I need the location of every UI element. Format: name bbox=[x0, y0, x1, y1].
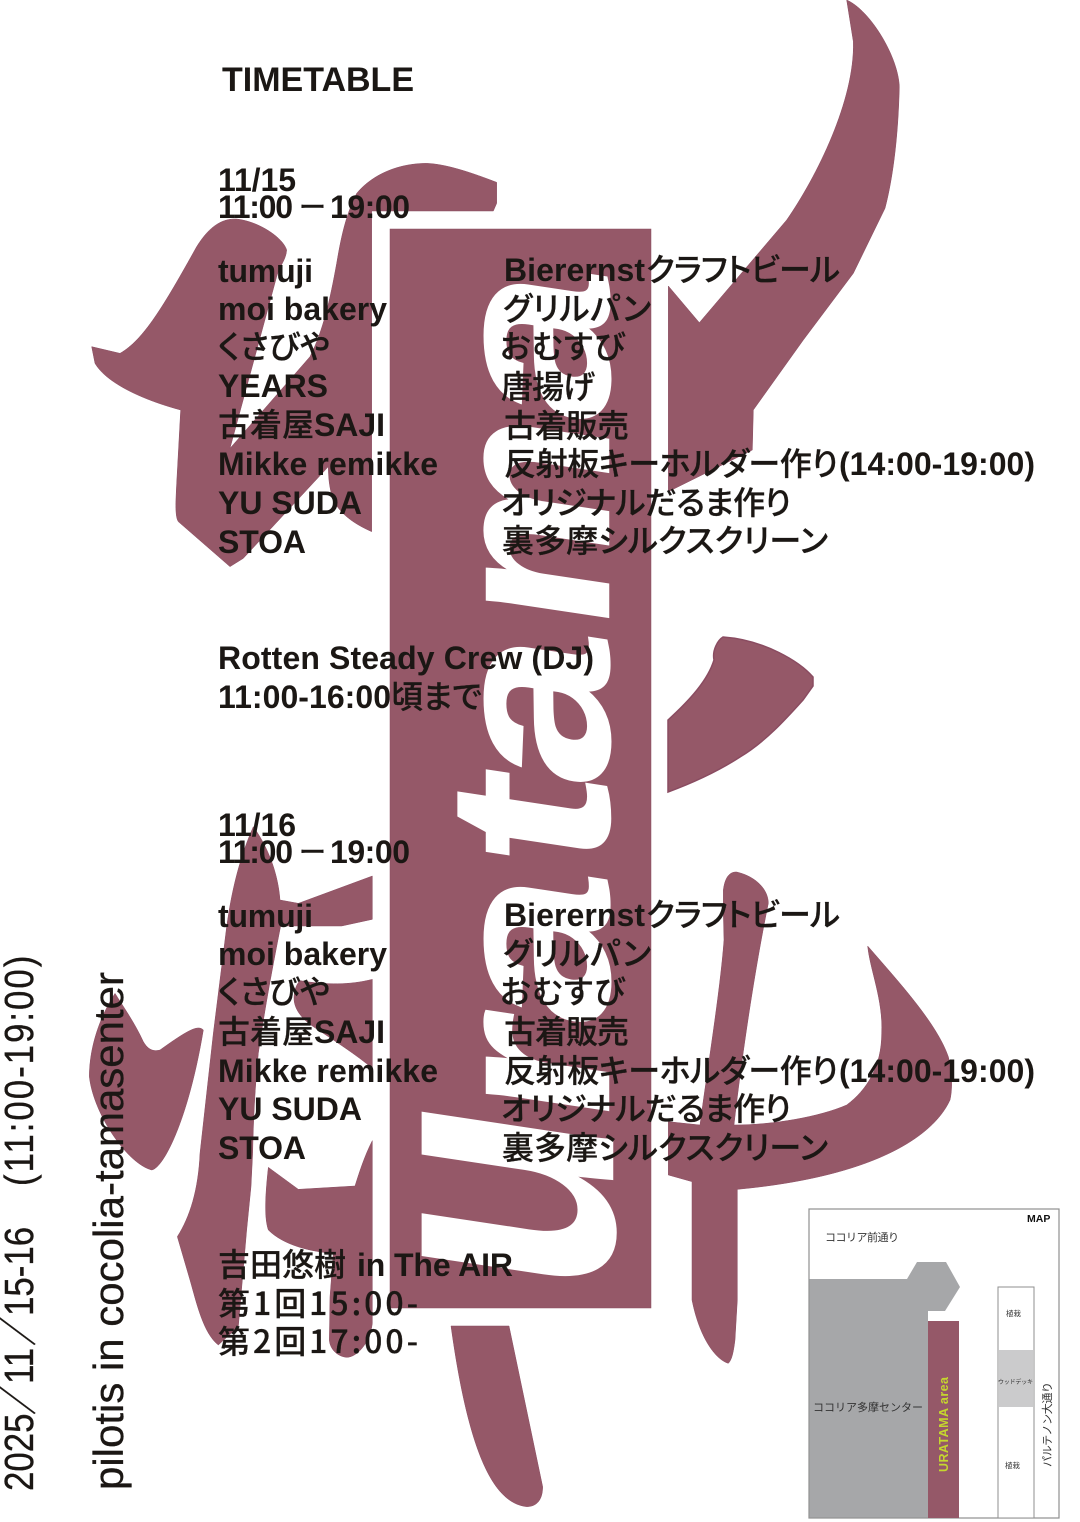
kanji calligraphy background bbox=[89, 0, 952, 1507]
date and hours, day one: 11:00 bbox=[218, 189, 293, 225]
map labels: ウッドデッキ bbox=[998, 1377, 1033, 1386]
map labels: 植栽 bbox=[1005, 1460, 1020, 1471]
date and hours, day two: ー bbox=[299, 831, 326, 871]
DJ slot: Rotten Steady Crew (DJ) bbox=[218, 640, 594, 676]
map labels: 植栽 bbox=[1006, 1308, 1022, 1319]
date and hours, day two: 19:00 bbox=[330, 834, 410, 870]
kanji stroke: upper left bbox=[92, 163, 497, 567]
vendor names, day one: YU SUDA bbox=[218, 485, 362, 521]
map labels: ココリア多摩センター bbox=[813, 1399, 923, 1415]
date and hours, day two: 11/16 bbox=[218, 807, 296, 843]
performance slot: 第1回15:00- bbox=[218, 1279, 418, 1325]
kanji stroke: lower right bbox=[668, 872, 952, 1363]
vendor names, day one: Mikke remikke bbox=[218, 446, 438, 482]
vendor offerings, day two bbox=[500, 890, 1035, 1169]
title: TIMETABLE bbox=[222, 61, 414, 99]
map frame bbox=[809, 1209, 1059, 1518]
date and hours, day two: 11:00 bbox=[218, 834, 293, 870]
vendor offerings, day one: グリルパン bbox=[503, 284, 651, 330]
map labels: URATAMA area bbox=[937, 1376, 951, 1472]
vendor offerings, day one: おむすび bbox=[500, 322, 626, 368]
kanji stroke: bottom spike bbox=[451, 1326, 543, 1507]
vendor names, day two: 古着屋 bbox=[218, 1007, 314, 1053]
vendor names, day two: SAJI bbox=[314, 1014, 385, 1050]
map labels: MAP bbox=[1027, 1213, 1050, 1225]
block: day one timetable bbox=[218, 162, 1035, 718]
vendor names, day one: YEARS bbox=[218, 368, 328, 404]
kanji stroke: lower left main bbox=[177, 827, 372, 1345]
vertical venue text: pilotis in cocolia-tamasenter bbox=[85, 972, 132, 1490]
vendor names, day one: STOA bbox=[218, 524, 306, 560]
performance slot: 第2回17:00- bbox=[218, 1317, 418, 1363]
vendor names, day two: moi bakery bbox=[218, 936, 387, 972]
kanji stroke: lower left inner upper bbox=[294, 979, 372, 1068]
vendor offerings, day two: オリジナルだるま作り bbox=[501, 1084, 791, 1130]
map building: cocolia tama center bbox=[810, 1262, 960, 1518]
vendor names, day two: くさびや bbox=[218, 967, 330, 1013]
vendor offerings, day one: クラフトビール bbox=[646, 245, 840, 291]
map labels: ココリア前通り bbox=[825, 1229, 899, 1245]
vendor names, day two: Mikke remikke bbox=[218, 1053, 438, 1089]
vendor names, day two: tumuji bbox=[218, 898, 313, 934]
vendor offerings, day one: 唐揚げ bbox=[501, 362, 595, 408]
vendor names, day one: tumuji bbox=[218, 253, 313, 289]
map strip: planting and wood deck bbox=[998, 1287, 1034, 1518]
kanji stroke: middle right bbox=[668, 637, 813, 792]
vendor offerings, day two: 裏多摩シルクスクリーン bbox=[502, 1123, 828, 1169]
vendor offerings, day one: 反射板キーホルダー作り bbox=[504, 439, 838, 485]
vendor offerings, day two: 反射板キーホルダー作り bbox=[504, 1046, 838, 1092]
vendor names, day two: STOA bbox=[218, 1130, 306, 1166]
white word: uratama: t bbox=[401, 753, 657, 879]
vendor names, day one: くさびや bbox=[218, 322, 330, 368]
white word: uratama: m bbox=[401, 394, 657, 640]
DJ slot bbox=[218, 640, 594, 718]
white word: uratama bbox=[289, 247, 689, 1314]
vendor names, day two: YU SUDA bbox=[218, 1091, 362, 1127]
vendor offerings, day two: おむすび bbox=[500, 967, 626, 1013]
performance slot: 吉田悠樹 bbox=[218, 1240, 346, 1286]
vendor offerings, day one: Bierernst bbox=[504, 252, 645, 288]
vendor offerings, day two: Bierernst bbox=[504, 897, 645, 933]
map area: URATAMA bbox=[928, 1321, 959, 1518]
date and hours, day one: ー bbox=[299, 186, 326, 226]
vertical date text bbox=[0, 956, 44, 1491]
kanji stroke: lower left blob bbox=[89, 993, 203, 1170]
white word: uratama: a bbox=[401, 850, 657, 1040]
map labels bbox=[813, 1213, 1055, 1472]
vendor offerings, day two: (14:00-19:00) bbox=[839, 1053, 1035, 1089]
DJ slot: 頃まで bbox=[391, 672, 482, 718]
map labels: パルテノン大通り bbox=[1039, 1382, 1055, 1467]
vendor names, day one: SAJI bbox=[314, 407, 385, 443]
vendor offerings, day one bbox=[500, 245, 1035, 562]
date and hours, day one: 19:00 bbox=[330, 189, 410, 225]
performance slot: in The AIR bbox=[357, 1247, 513, 1283]
white word: uratama: a bbox=[401, 247, 657, 437]
kanji stroke: lower left inner lower bbox=[266, 1141, 372, 1357]
vendor names, day one: moi bakery bbox=[218, 291, 387, 327]
vendor names, day one bbox=[218, 253, 438, 560]
date and hours, day one: 11/15 bbox=[218, 162, 296, 198]
map bbox=[809, 1209, 1059, 1518]
central maroon panel with white lettering bbox=[289, 229, 689, 1314]
vendor offerings, day two: クラフトビール bbox=[646, 890, 840, 936]
white word: uratama: u bbox=[289, 1072, 689, 1314]
vendor offerings, day one: オリジナルだるま作り bbox=[501, 478, 791, 524]
vendor names, day one: 古着屋 bbox=[218, 400, 314, 446]
vendor names, day two bbox=[218, 898, 438, 1166]
vendor offerings, day one: 裏多摩シルクスクリーン bbox=[502, 516, 828, 562]
vendor offerings, day one: (14:00-19:00) bbox=[839, 446, 1035, 482]
vendor offerings, day one: 古着販売 bbox=[504, 401, 629, 447]
vendor offerings, day two: グリルパン bbox=[503, 929, 651, 975]
DJ slot: 11:00-16:00 bbox=[218, 679, 391, 715]
vendor offerings, day two: 古着販売 bbox=[504, 1007, 629, 1053]
date and hours, day one bbox=[218, 162, 410, 226]
kanji stroke: upper right bbox=[668, 0, 899, 492]
white word: uratama: r bbox=[401, 994, 657, 1135]
performance slot bbox=[218, 1240, 513, 1363]
white word: uratama: a bbox=[401, 610, 657, 800]
block: day two timetable bbox=[218, 807, 1035, 1363]
date and hours, day two bbox=[218, 807, 410, 871]
